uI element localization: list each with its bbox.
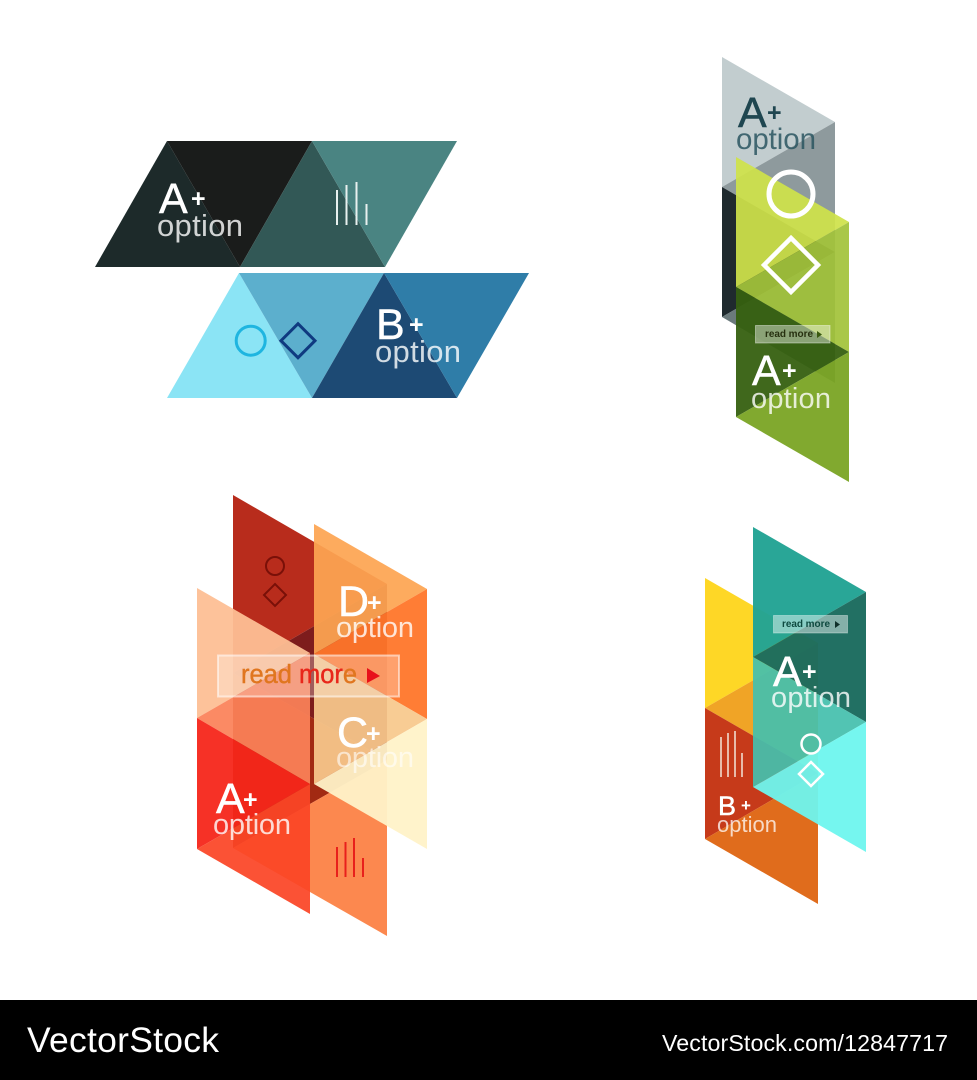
heading: B+ option small: +: [741, 796, 751, 815]
heading: A+ option red: [213, 775, 291, 841]
button: read more: read more: [765, 329, 813, 340]
panel: yellow and orange banner: [705, 578, 818, 904]
heading: A+ option grey: A: [738, 89, 767, 137]
icon: diamond: [799, 762, 823, 786]
heading: A+ option grey: +: [767, 99, 782, 127]
panel: green vertical banner: [736, 157, 849, 482]
panel: grey vertical banner: [722, 57, 835, 383]
icon: diamond: [764, 238, 818, 292]
heading: A+ option grey: option: [736, 123, 816, 156]
button: read more teal: read more: [782, 619, 830, 630]
heading: A+ option: +: [191, 185, 206, 213]
button: read more teal: [774, 616, 848, 633]
heading: A+ option grey: [736, 89, 816, 156]
icon: bars white: [721, 731, 742, 777]
heading: C+ option: option: [336, 742, 414, 774]
footer image id: VectorStock.com/12847717: [662, 1030, 948, 1056]
heading: A+ option teal: option: [771, 682, 851, 714]
panel: blue horizontal banner: [167, 273, 529, 398]
icon: circle: [266, 557, 284, 575]
heading: A+ option: [157, 175, 243, 243]
heading: A+ option: option: [157, 208, 243, 243]
heading: B+ option: option: [375, 334, 461, 369]
heading: C+ option: C: [337, 709, 368, 757]
icon: diamond: [281, 324, 315, 358]
heading: A+ option red: A: [216, 775, 245, 823]
heading: B+ option: +: [409, 311, 424, 339]
icon: circle: [769, 172, 813, 216]
panel: dark horizontal banner: [95, 141, 457, 267]
button: read more large: read more: [241, 661, 357, 689]
icon: circle: [802, 734, 820, 754]
heading: D+ option: +: [367, 589, 382, 617]
footer logo text: VectorStock: [27, 1020, 219, 1060]
heading: A+ option teal: A: [773, 648, 802, 696]
heading: A+ option red: +: [243, 786, 258, 814]
heading: A+ option green: A: [752, 347, 781, 395]
heading: B+ option: [375, 301, 461, 369]
heading: B+ option: B: [376, 301, 405, 349]
heading: A+ option red: option: [213, 809, 291, 841]
button: read more large: [218, 656, 399, 696]
icon: diamond: [264, 584, 286, 606]
heading: D+ option: option: [336, 612, 414, 644]
heading: A+ option green: [751, 347, 831, 415]
heading: B+ option small: B: [718, 791, 736, 821]
panel: teal vertical banner: [753, 527, 866, 852]
button: read more: [756, 326, 830, 343]
footer bar: [0, 1000, 977, 1080]
heading: C+ option: [336, 709, 414, 774]
heading: A+ option green: +: [782, 357, 797, 385]
heading: D+ option: D: [338, 578, 369, 626]
heading: A+ option green: option: [751, 383, 831, 415]
panel: red back banner: [233, 495, 387, 936]
icon: circle: [236, 326, 265, 355]
heading: B+ option small: [717, 791, 777, 837]
heading: C+ option: +: [366, 720, 381, 748]
icon: bars: [337, 182, 366, 225]
heading: D+ option: [336, 578, 414, 644]
heading: A+ option: A: [159, 175, 188, 223]
heading: A+ option teal: [771, 648, 851, 714]
panel: orange and cream banner: [314, 524, 427, 849]
icon: bars red: [337, 838, 363, 877]
panel: peach and red banner: [197, 588, 310, 914]
heading: A+ option teal: +: [802, 658, 817, 686]
heading: B+ option small: option: [717, 812, 777, 837]
